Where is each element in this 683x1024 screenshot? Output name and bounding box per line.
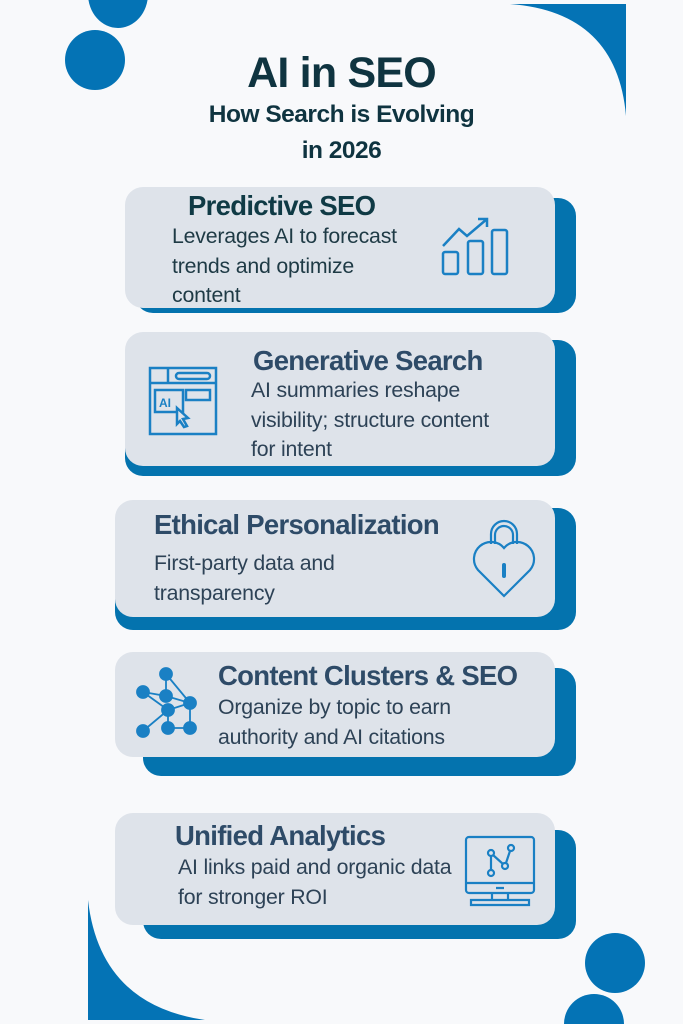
text block: authority and AI citations xyxy=(218,724,445,748)
icon: bar chart xyxy=(442,218,508,276)
text block: Organize by topic to earn xyxy=(218,695,451,719)
decoration: bottom-right circles xyxy=(564,933,645,1024)
text block: AI summaries reshape xyxy=(251,378,460,402)
text block: Leverages AI to forecast xyxy=(172,224,397,248)
panel: ethical personalization xyxy=(115,500,576,630)
subtitle xyxy=(209,101,474,164)
panel: unified analytics xyxy=(115,813,576,939)
text block xyxy=(218,695,451,748)
text block xyxy=(251,378,489,461)
decoration: top-left circles xyxy=(65,0,148,90)
decoration: bottom-left arc xyxy=(88,900,205,1020)
text block: transparency xyxy=(154,580,275,604)
panel: content clusters xyxy=(115,652,576,776)
text block: visibility; structure content xyxy=(251,408,489,432)
heading: Unified Analytics xyxy=(175,820,385,851)
heading: Content Clusters & SEO xyxy=(218,660,517,691)
heading: Predictive SEO xyxy=(188,190,375,221)
decoration: top-right arc xyxy=(510,4,626,116)
text block: trends and optimize xyxy=(172,254,354,278)
text block xyxy=(154,551,335,604)
text block: for stronger ROI xyxy=(178,884,327,908)
icon: browser AI xyxy=(148,366,218,436)
text block: First-party data and xyxy=(154,551,335,575)
text block: content xyxy=(172,283,240,307)
text block: AI links paid and organic data xyxy=(178,855,451,879)
text block: for intent xyxy=(251,437,332,461)
icon: heart lock xyxy=(472,520,536,598)
subtitle: How Search is Evolving xyxy=(209,101,474,128)
heading: Generative Search xyxy=(253,345,483,376)
icon: network xyxy=(136,667,197,738)
panel: predictive SEO xyxy=(125,187,576,313)
heading: Ethical Personalization xyxy=(154,509,439,540)
text block xyxy=(178,855,452,908)
title: AI in SEO xyxy=(247,49,436,97)
panel: generative search xyxy=(125,332,576,476)
subtitle: in 2026 xyxy=(302,137,381,164)
text block xyxy=(172,224,397,307)
icon: browser AI: AI xyxy=(159,396,171,410)
icon: monitor chart xyxy=(464,836,536,906)
